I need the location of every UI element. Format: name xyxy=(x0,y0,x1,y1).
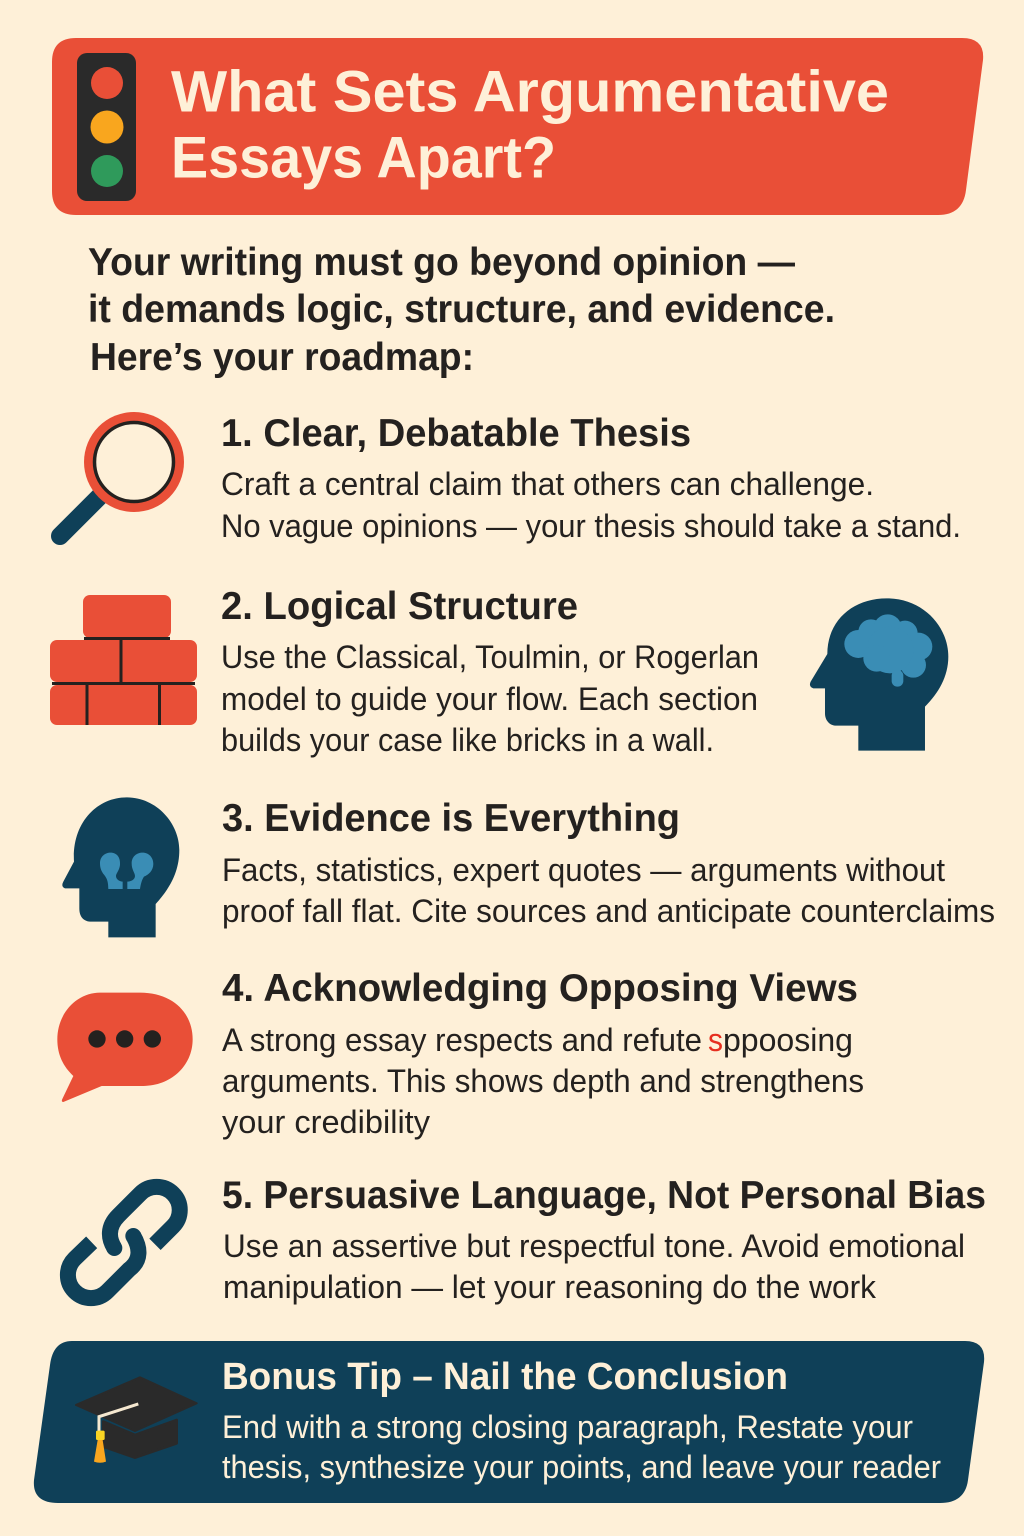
section 4: opposing views: 4. Acknowledging Opposing Views xyxy=(222,967,858,1010)
section 3: evidence xyxy=(222,797,995,929)
section 1: thesis: No vague opinions — your thesis should take a stand. xyxy=(221,508,961,544)
section 2: structure: Use the Classical, Toulmin, or Rogerlan xyxy=(221,639,759,675)
section 2: structure: 2. Logical Structure xyxy=(221,585,578,628)
section 4: opposing views: your credibility xyxy=(222,1104,431,1140)
intro text xyxy=(88,241,835,379)
section 4: opposing views: s xyxy=(708,1022,723,1058)
section 4: opposing views: A strong essay respects and refute xyxy=(222,1022,702,1058)
icon: speech bubble xyxy=(57,993,193,1102)
section 5: persuasive language: manipulation — let your reasoning do the work xyxy=(223,1269,877,1305)
intro text: it demands logic, structure, and evidence. xyxy=(88,288,835,331)
bonus text: End with a strong closing paragraph, Restate your xyxy=(222,1409,913,1445)
section 3: evidence: Facts, statistics, expert quotes — arguments without xyxy=(222,852,945,888)
section 3: evidence: proof fall flat. Cite sources and anticipate counterclaims xyxy=(222,893,995,929)
section 5: persuasive language xyxy=(222,1174,986,1305)
bonus text xyxy=(222,1409,941,1485)
section 2: structure: builds your case like bricks in a wall. xyxy=(221,722,714,758)
section 1: thesis: Craft a central claim that others can challenge. xyxy=(221,466,874,502)
title xyxy=(171,60,889,190)
bonus heading: Bonus Tip – Nail the Conclusion xyxy=(222,1356,788,1398)
header banner xyxy=(52,38,983,215)
section 4: opposing views xyxy=(222,967,864,1140)
icon: brick wall xyxy=(50,595,197,725)
icon: traffic light xyxy=(77,53,136,201)
panel: bonus tip xyxy=(34,1341,984,1503)
section 3: evidence: 3. Evidence is Everything xyxy=(222,797,680,840)
icon: magnifying glass xyxy=(60,412,184,536)
section 4: opposing views: ppoosing xyxy=(723,1022,853,1058)
icon: head with ears xyxy=(62,797,179,937)
bonus text: thesis, synthesize your points, and leave your reader xyxy=(222,1449,941,1485)
title: What Sets Argumentative xyxy=(171,60,889,124)
icon: head with brain xyxy=(810,598,948,751)
section 1: thesis: 1. Clear, Debatable Thesis xyxy=(221,412,691,455)
icon: chain link xyxy=(68,1187,180,1298)
section 2: structure: model to guide your flow. Each section xyxy=(221,681,758,717)
title: Essays Apart? xyxy=(171,126,556,190)
section 2: structure xyxy=(221,585,759,758)
intro text: Here’s your roadmap: xyxy=(90,336,474,379)
section 5: persuasive language: Use an assertive but respectful tone. Avoid emotional xyxy=(223,1228,965,1264)
icon: graduation cap xyxy=(76,1377,197,1463)
section 5: persuasive language: 5. Persuasive Language, Not Personal Bias xyxy=(222,1174,986,1217)
section 1: thesis xyxy=(221,412,961,544)
intro text: Your writing must go beyond opinion — xyxy=(88,241,795,284)
section 4: opposing views: arguments. This shows depth and strengthens xyxy=(222,1063,864,1099)
